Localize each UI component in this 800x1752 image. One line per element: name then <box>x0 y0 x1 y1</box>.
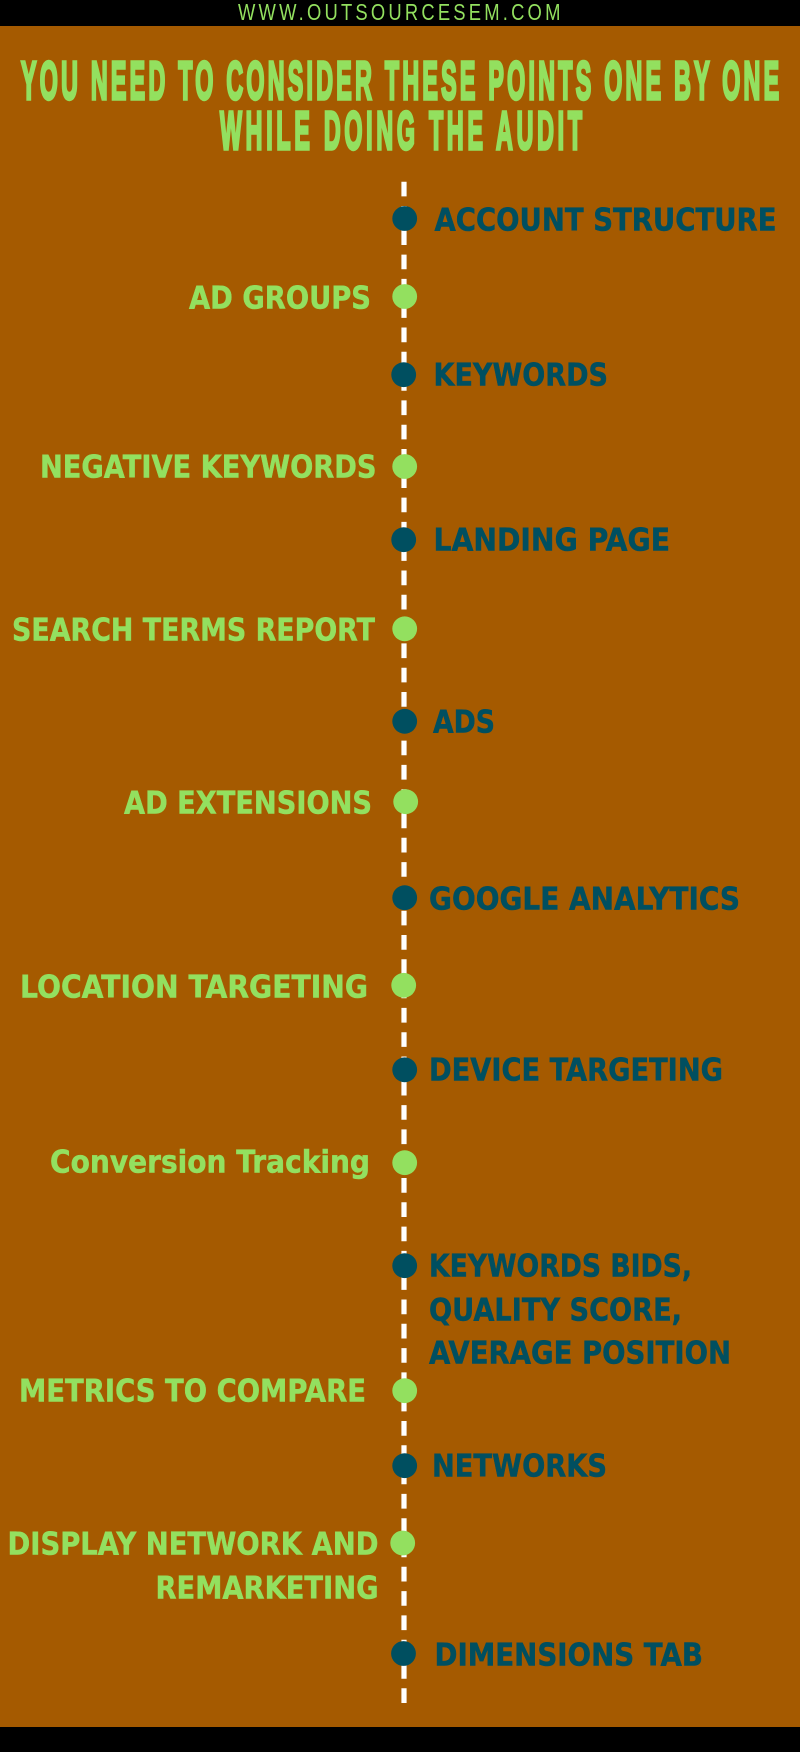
item: keywords bids, quality score, average position <box>392 1248 731 1372</box>
item: device targeting: DEVICE TARGETING <box>429 1052 723 1088</box>
title: YOU NEED TO CONSIDER THESE POINTS ONE BY ONE <box>21 50 779 111</box>
top black bar with site URL <box>0 0 800 26</box>
item: dimensions tab: DIMENSIONS TAB <box>434 1638 703 1674</box>
item: ad extensions: AD EXTENSIONS <box>124 786 372 822</box>
item: ads: ADS <box>433 704 495 740</box>
item: display network and remarketing: REMARKETING <box>156 1570 378 1606</box>
item: display network and remarketing <box>8 1526 415 1606</box>
bottom black bar <box>0 1727 800 1752</box>
timeline dashed line <box>401 182 407 1703</box>
item: keywords bids, quality score, average position: AVERAGE POSITION <box>429 1336 731 1372</box>
top black bar with site URL: WWW.OUTSOURCESEM.COM <box>238 0 560 26</box>
item: ad groups: AD GROUPS <box>189 280 371 316</box>
title: WHILE DOING THE AUDIT <box>220 100 582 161</box>
item: display network and remarketing: DISPLAY NETWORK AND <box>8 1526 378 1562</box>
item: negative keywords: NEGATIVE KEYWORDS <box>40 450 376 486</box>
item: ads <box>392 704 495 740</box>
item: keywords bids, quality score, average position: QUALITY SCORE, <box>429 1292 682 1328</box>
title <box>21 50 779 161</box>
item: search terms report: SEARCH TERMS REPORT <box>12 612 375 648</box>
item: landing page: LANDING PAGE <box>434 522 670 558</box>
item: keywords: KEYWORDS <box>434 358 608 394</box>
item: metrics to compare: METRICS TO COMPARE <box>19 1374 366 1410</box>
item: keywords bids, quality score, average position: KEYWORDS BIDS, <box>429 1248 692 1284</box>
item: location targeting: LOCATION TARGETING <box>20 970 368 1006</box>
item: conversion tracking: Conversion Tracking <box>50 1144 370 1180</box>
item: google analytics: GOOGLE ANALYTICS <box>429 882 740 918</box>
item: networks: NETWORKS <box>432 1448 607 1484</box>
